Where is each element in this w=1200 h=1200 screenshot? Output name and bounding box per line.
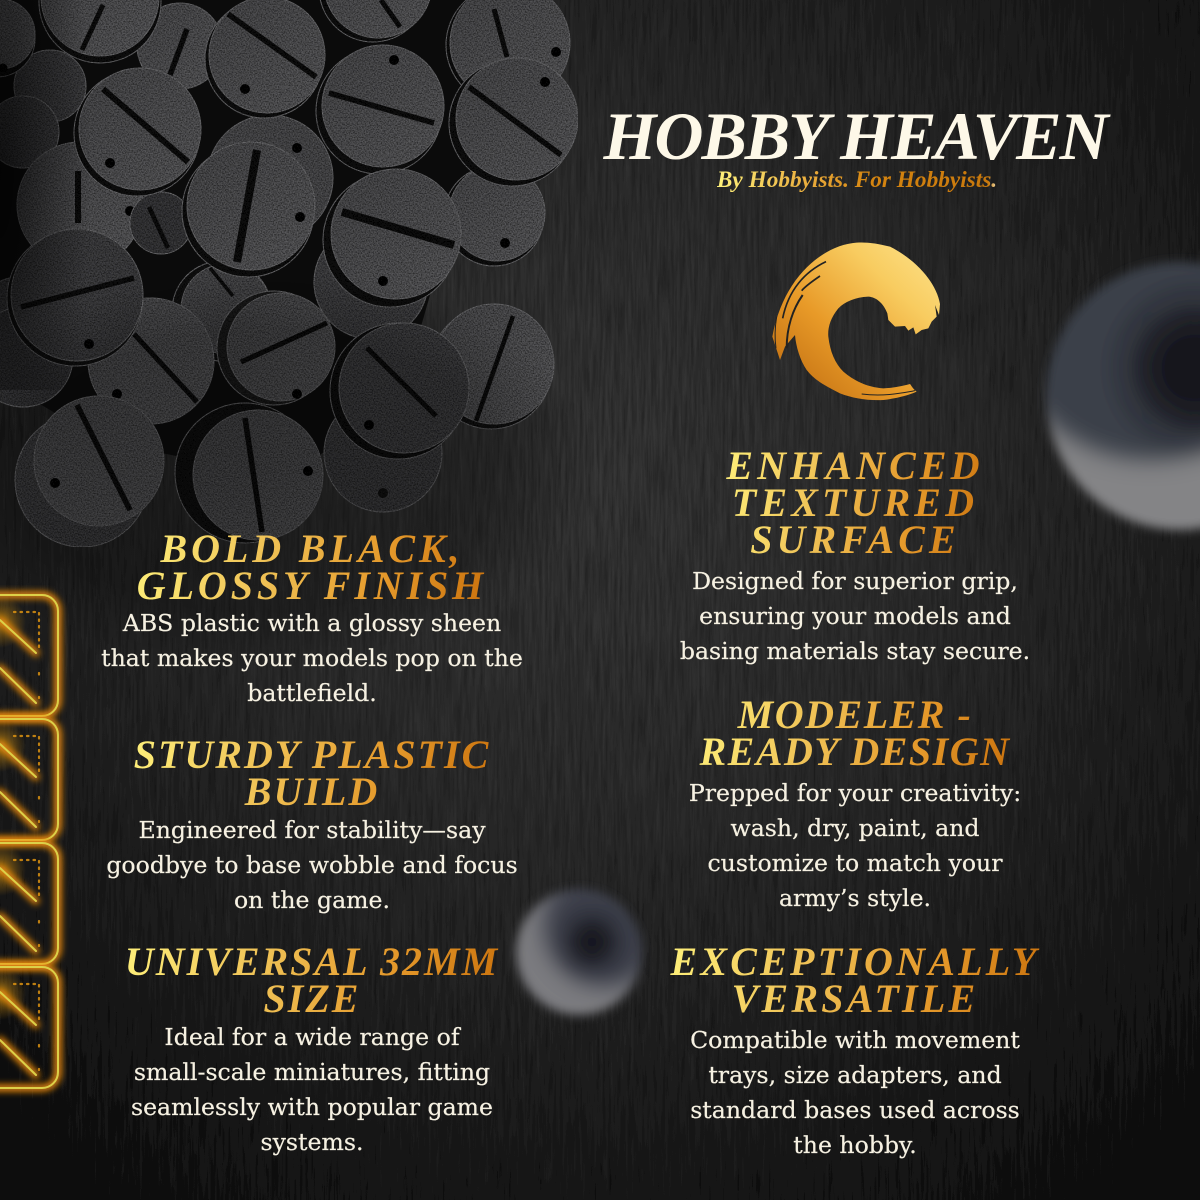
heading [129, 530, 495, 604]
text [131, 1023, 493, 1156]
heading: EXCEPTIONALLY [670, 939, 1040, 984]
text [101, 609, 523, 707]
heading: SIZE [264, 976, 360, 1021]
heading: SURFACE [750, 517, 960, 562]
text: systems. [260, 1128, 363, 1156]
text: that makes your models pop on the [101, 644, 523, 672]
text: standard bases used across [690, 1096, 1020, 1124]
icon: gold enso brush circle logo [772, 242, 940, 400]
text: Compatible with movement [690, 1026, 1020, 1054]
heading: ENHANCED [726, 443, 984, 488]
heading: UNIVERSAL 32MM [125, 939, 499, 984]
text [680, 567, 1030, 665]
neon panel 2 [0, 719, 58, 840]
text: ensuring your models and [699, 602, 1011, 630]
neon panel 3 [0, 843, 58, 964]
heading: GLOSSY FINISH [137, 563, 487, 608]
heading: STURDY PLASTIC [134, 732, 490, 777]
text: trays, size adapters, and [708, 1061, 1002, 1089]
text [106, 816, 518, 914]
text: battlefield. [247, 679, 377, 707]
block: universal 32mm size [125, 939, 499, 1156]
heading: TEXTURED [732, 480, 978, 525]
heading [718, 447, 992, 558]
tagline: By Hobbyists. For Hobbyists. [717, 167, 997, 193]
text: Designed for superior grip, [692, 567, 1018, 595]
block: modeler-ready design [689, 692, 1021, 912]
text: Engineered for stability—say [138, 816, 486, 844]
heading: BOLD BLACK, [161, 526, 463, 571]
neon chevron panels at left edge [0, 586, 68, 1098]
text: on the game. [234, 886, 390, 914]
bokeh blobs [510, 257, 1200, 1022]
text: basing materials stay secure. [680, 637, 1030, 665]
heading [117, 943, 507, 1017]
text: wash, dry, paint, and [731, 814, 979, 842]
neon panel 4 [0, 967, 58, 1088]
heading: MODELER - [738, 692, 972, 737]
heading: BUILD [245, 769, 379, 814]
text: customize to match your [707, 849, 1003, 877]
text: army’s style. [779, 884, 931, 912]
title: HOBBY HEAVEN [603, 98, 1107, 174]
text: seamlessly with popular game [131, 1093, 493, 1121]
block: sturdy plastic build [106, 732, 518, 914]
text: ABS plastic with a glossy sheen [123, 609, 501, 637]
heading [126, 736, 498, 810]
text: the hobby. [793, 1131, 917, 1159]
text [689, 779, 1021, 912]
text: Ideal for a wide range of [164, 1023, 460, 1051]
heading [662, 943, 1048, 1017]
text: goodbye to base wobble and focus [106, 851, 518, 879]
block: bold black glossy finish [101, 526, 523, 707]
block: enhanced textured surface [680, 443, 1030, 665]
text [690, 1026, 1020, 1159]
heading: VERSATILE [732, 976, 978, 1021]
text: small-scale miniatures, fitting [134, 1058, 490, 1086]
block: exceptionally versatile [670, 939, 1040, 1159]
heading [691, 696, 1019, 770]
neon panel 1 [0, 595, 58, 716]
heading: READY DESIGN [699, 729, 1011, 774]
text: Prepped for your creativity: [689, 779, 1021, 807]
